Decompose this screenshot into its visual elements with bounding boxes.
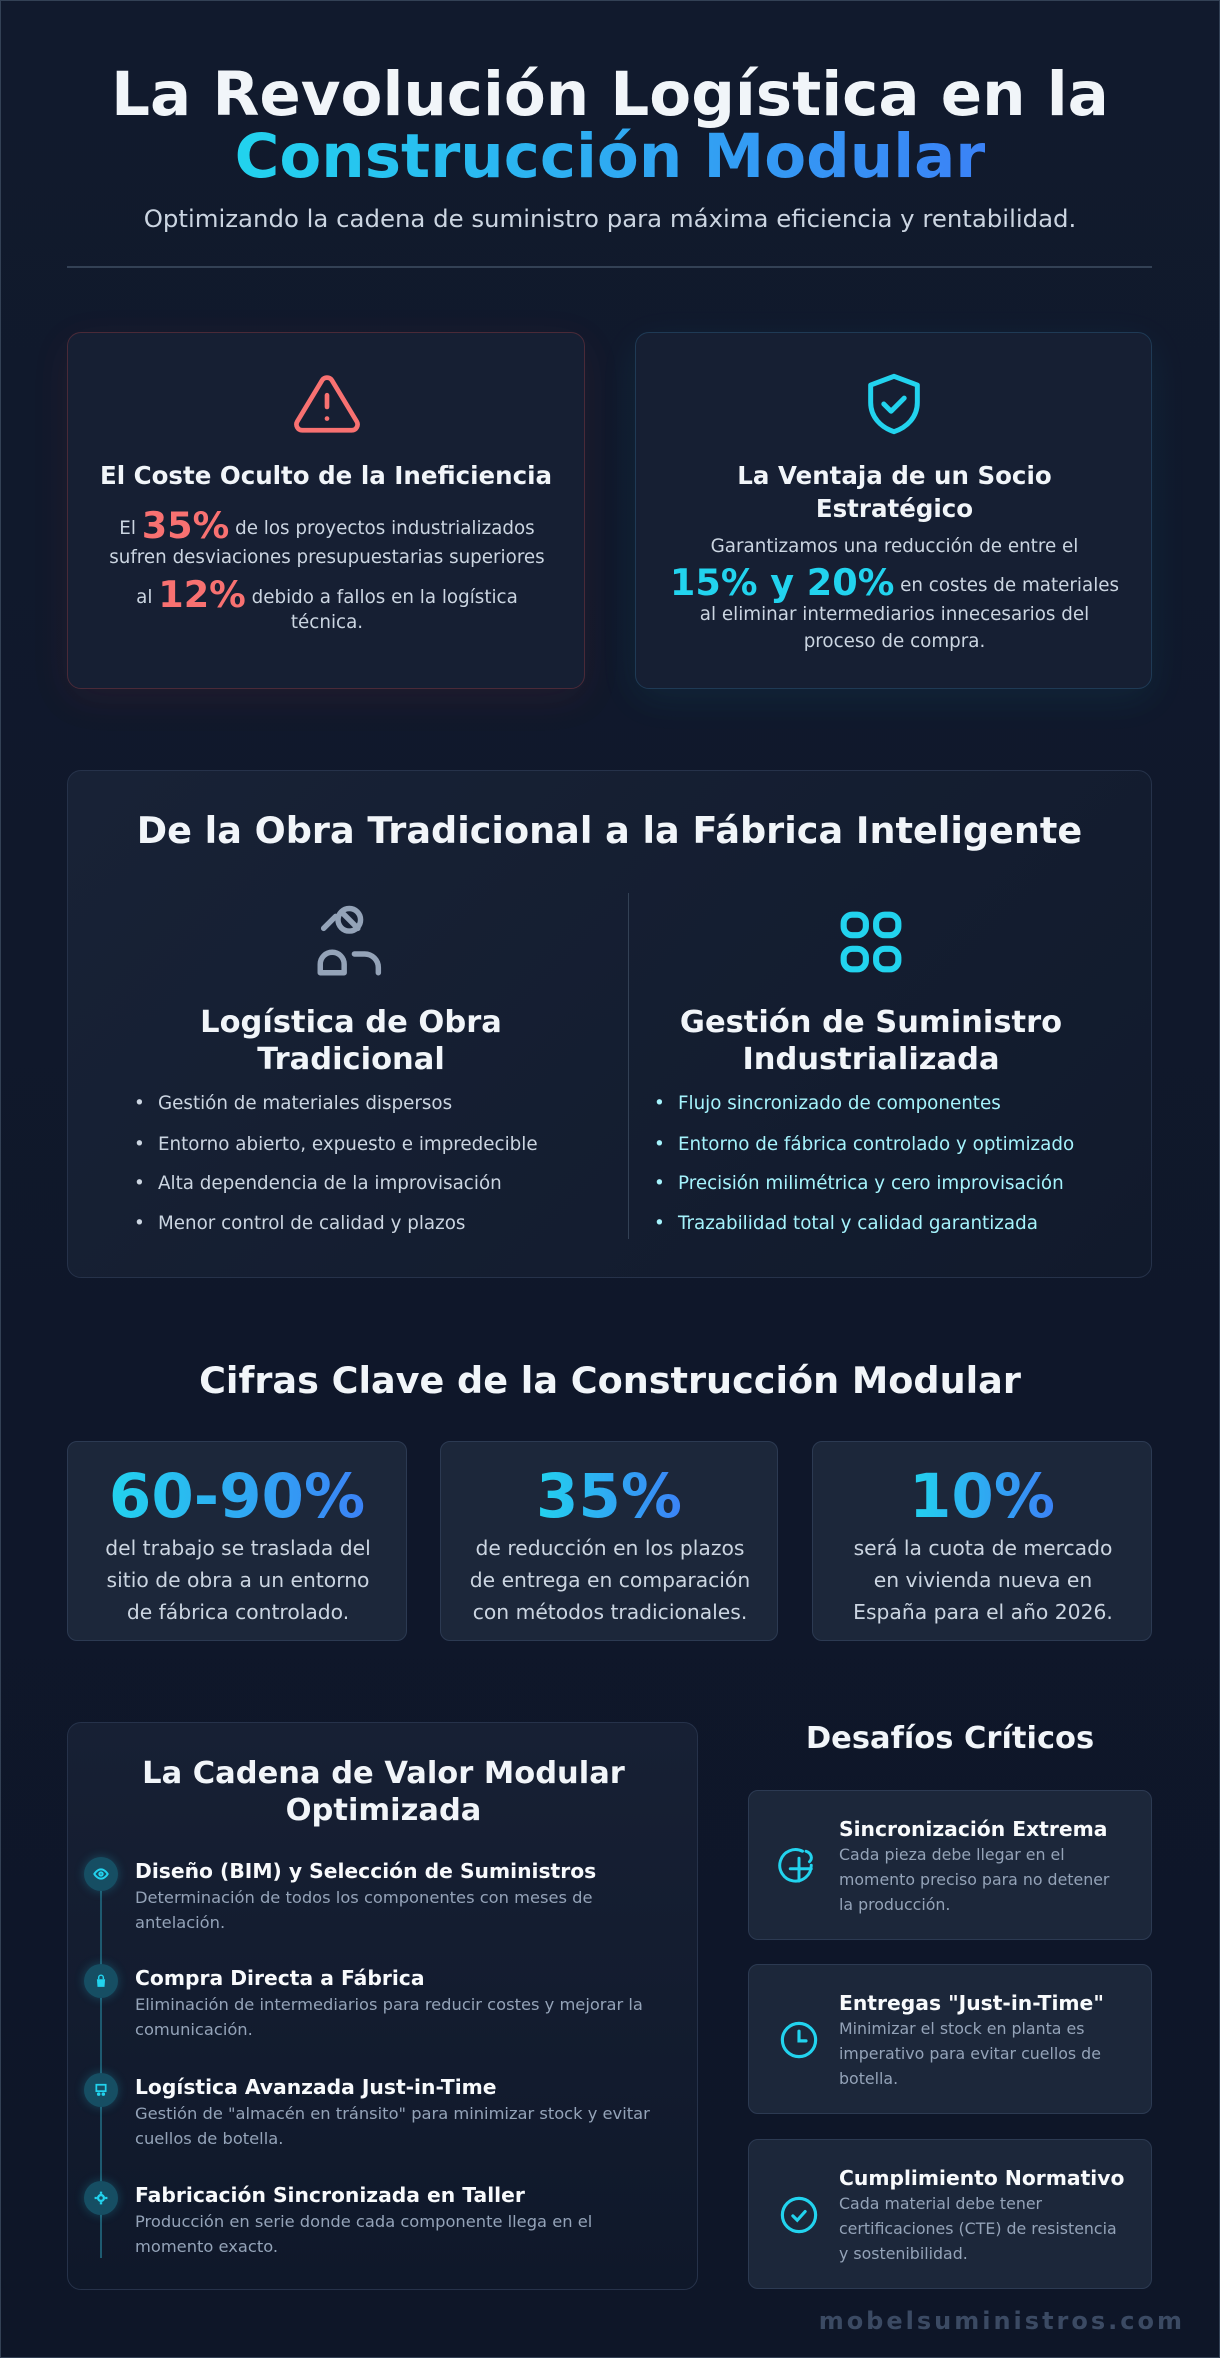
- title: Construcción Modular: [235, 121, 985, 192]
- subtitle: Optimizando la cadena de suministro para máxima eficiencia y rentabilidad.: [144, 204, 1076, 233]
- timeline: Determinación de todos los componentes con meses de antelación.: [135, 1888, 593, 1932]
- list: traditional: [136, 1093, 538, 1234]
- panel: comparison: Alta dependencia de la improvisación: [158, 1173, 502, 1194]
- subheading: traditional: Tradicional: [257, 1042, 445, 1077]
- timeline: Logística Avanzada Just-in-Time: [135, 2075, 497, 2099]
- stat card 3: [812, 1441, 1152, 1641]
- panel: comparison: Flujo sincronizado de componentes: [678, 1093, 1001, 1114]
- icon: sync: [778, 1848, 813, 1883]
- challenge card 1: Cada pieza debe llegar en el momento preciso para no detener la producción.: [839, 1845, 1109, 1914]
- subheading: traditional: [200, 1005, 502, 1077]
- stat card 3: en vivienda nueva en: [874, 1568, 1092, 1592]
- step 2: [80, 1960, 643, 2039]
- title: [111, 59, 1109, 192]
- title: La Revolución Logística en la: [111, 59, 1109, 130]
- timeline: Producción en serie donde cada componente llega en el momento exacto.: [135, 2212, 592, 2256]
- stat card 3: España para el año 2026.: [853, 1600, 1113, 1624]
- stat card 3: será la cuota de mercado: [854, 1536, 1112, 1560]
- step 1: [80, 1854, 596, 1932]
- panel: comparison: Gestión de materiales dispersos: [158, 1093, 452, 1114]
- challenge card 3: [748, 2139, 1152, 2289]
- icon: clock: [780, 2022, 818, 2058]
- stat card 2: de entrega en comparación: [470, 1568, 750, 1592]
- heading: La Ventaja de un Socio: [737, 461, 1052, 490]
- panel: hidden cost: técnica.: [291, 612, 363, 633]
- timeline: Eliminación de intermediarios para reducir costes y mejorar la comunicación.: [135, 1995, 643, 2039]
- challenge card 3: Cumplimiento Normativo: [839, 2166, 1124, 2190]
- panel: strategic partner: al eliminar intermediarios innecesarios del: [700, 604, 1089, 625]
- panel: strategic partner: proceso de compra.: [804, 631, 985, 652]
- heading: [142, 1756, 625, 1828]
- heading: challenges: Desafíos Críticos: [806, 1721, 1094, 1756]
- subheading: traditional: Logística de Obra: [200, 1005, 502, 1040]
- stat card 1: 60-90%: [109, 1461, 365, 1532]
- heading: El Coste Oculto de la Ineficiencia: [100, 461, 552, 490]
- panel: comparison: Precisión milimétrica y cero improvisación: [678, 1173, 1064, 1194]
- heading: key figures: Cifras Clave de la Construcción Modular: [199, 1359, 1021, 1402]
- footer: brand: mobelsuministros.com: [819, 2307, 1185, 2335]
- heading: De la Obra Tradicional a la Fábrica Inteligente: [137, 809, 1082, 852]
- timeline: [80, 1854, 650, 2258]
- list: industrial: [656, 1093, 1074, 1234]
- step 3: [80, 2069, 650, 2148]
- stat card 2: de reducción en los plazos: [476, 1536, 744, 1560]
- panel: comparison: Trazabilidad total y calidad garantizada: [678, 1213, 1038, 1234]
- step 4: [80, 2177, 592, 2256]
- icon: shield: [868, 374, 920, 434]
- stat card 2: 35%: [536, 1461, 682, 1532]
- text block: [670, 536, 1119, 652]
- panel: comparison: Entorno abierto, expuesto e impredecible: [158, 1134, 538, 1155]
- timeline: Gestión de "almacén en tránsito" para minimizar stock y evitar cuellos de botella.: [135, 2104, 650, 2148]
- heading: Estratégico: [816, 494, 973, 523]
- icon: gear: [84, 2181, 118, 2215]
- timeline: Diseño (BIM) y Selección de Suministros: [135, 1859, 596, 1883]
- icon: traditional site: [318, 906, 382, 976]
- stat card 1: [67, 1441, 407, 1641]
- stat card 1: de fábrica controlado.: [127, 1600, 349, 1624]
- icon: truck: [84, 2073, 118, 2107]
- subheading: industrial: Gestión de Suministro: [680, 1005, 1062, 1040]
- stat card 1: del trabajo se traslada del: [105, 1536, 371, 1560]
- icon: warning: [294, 375, 360, 433]
- heading: Optimizada: [286, 1793, 481, 1828]
- subheading: industrial: Industrializada: [742, 1042, 1000, 1077]
- panel: hidden cost: al 12% debido a fallos en la logística: [136, 573, 518, 616]
- heading: La Cadena de Valor Modular: [142, 1756, 625, 1791]
- panel: hidden cost: [67, 332, 585, 689]
- challenge card 1: Sincronización Extrema: [839, 1817, 1107, 1841]
- stat card 2: con métodos tradicionales.: [473, 1600, 747, 1624]
- timeline: Fabricación Sincronizada en Taller: [135, 2183, 525, 2207]
- challenge card 2: Entregas "Just-in-Time": [839, 1991, 1104, 2015]
- subheading: industrial: [680, 1005, 1062, 1077]
- stat card 3: 10%: [909, 1461, 1055, 1532]
- challenge card 1: [748, 1790, 1152, 1940]
- timeline: Compra Directa a Fábrica: [135, 1966, 425, 1990]
- panel: comparison: Menor control de calidad y plazos: [158, 1213, 465, 1234]
- text block: [109, 504, 545, 633]
- challenge card 3: Cada material debe tener certificaciones (CTE) de resistencia y sostenibilidad.: [839, 2194, 1117, 2263]
- challenge card 2: [748, 1964, 1152, 2114]
- stat card 1: sitio de obra a un entorno: [107, 1568, 369, 1592]
- panel: comparison: [67, 770, 1152, 1278]
- icon: eye: [84, 1857, 118, 1891]
- challenge card 2: Minimizar el stock en planta es imperativo para evitar cuellos de botella.: [839, 2019, 1101, 2088]
- icon: check: [780, 2196, 818, 2234]
- panel: strategic partner: [635, 332, 1152, 689]
- panel: hidden cost: sufren desviaciones presupuestarias superiores: [109, 547, 545, 568]
- panel: comparison: Entorno de fábrica controlado y optimizado: [678, 1134, 1074, 1155]
- panel: value chain: [67, 1722, 698, 2290]
- icon: grid: [840, 912, 902, 972]
- panel: strategic partner: 15% y 20% en costes de materiales: [670, 561, 1119, 604]
- panel: hidden cost: El 35% de los proyectos industrializados: [119, 504, 535, 547]
- heading: [737, 461, 1052, 523]
- stat card 2: [440, 1441, 778, 1641]
- icon: bag: [84, 1964, 118, 1998]
- panel: strategic partner: Garantizamos una reducción de entre el: [711, 536, 1078, 557]
